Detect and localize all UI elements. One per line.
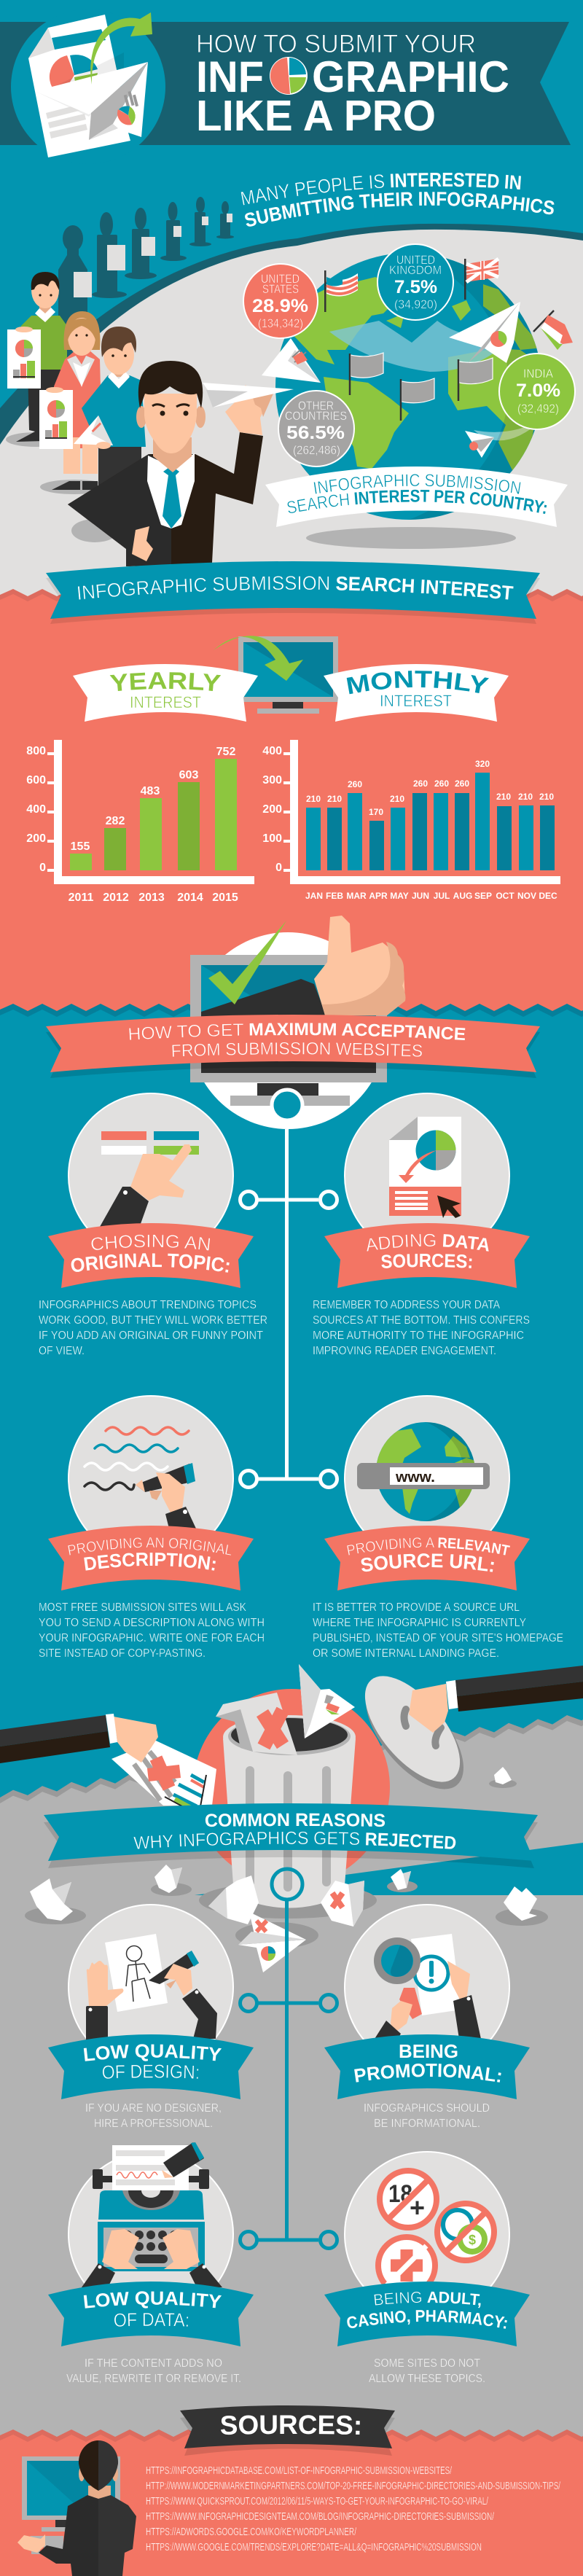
- text: topic body: WORK GOOD, BUT THEY WILL WORK BETTER: [39, 1314, 267, 1327]
- panel: choosing an original topic: [39, 1093, 267, 1357]
- section heading: search interest: [46, 561, 540, 624]
- callout: united states: (134,342): [258, 316, 303, 330]
- ribbon: monthly interest: MONTHLY: [347, 671, 489, 694]
- title: INF: [196, 52, 264, 101]
- text: data sources body: REMEMBER TO ADDRESS YOUR DATA: [313, 1299, 500, 1311]
- text: adult casino pharmacy body: [369, 2357, 485, 2385]
- ribbon: yearly interest: [73, 664, 258, 722]
- heading: being promotional: PROMOTIONAL:: [354, 2064, 501, 2083]
- title: GRAPHIC: [312, 52, 509, 101]
- callout: india: 7.0%: [516, 380, 560, 401]
- flag: united kingdom: [464, 259, 498, 300]
- person at computer: [17, 2440, 136, 2576]
- bar chart: monthly interest: 0: [275, 862, 282, 874]
- bar chart: monthly interest: 210: [539, 792, 554, 802]
- heading: chosing an original topic: [71, 1235, 230, 1273]
- heading: low quality of design: LOW QUALITY: [83, 2044, 222, 2061]
- text: source links: HTTPS://ADWORDS.GOOGLE.COM/KO/KEYWORDPLANNER/: [146, 2526, 357, 2538]
- bar chart: monthly interest: 200: [262, 803, 282, 816]
- heading: relevant source url: PROVIDING A RELEVANT: [347, 1537, 510, 1556]
- heading: relevant source url: SOURCE URL:: [361, 1553, 494, 1572]
- text: source url body: OR SOME INTERNAL LANDING PAGE.: [313, 1647, 499, 1660]
- bar chart: monthly interest: 260: [434, 778, 449, 789]
- text: topic body: OF VIEW.: [39, 1345, 85, 1357]
- callout: other countries: [278, 391, 354, 467]
- callout: other countries: COUNTRIES: [285, 409, 347, 423]
- heading: adult casino pharmacy: CASINO, PHARMACY:: [347, 2310, 507, 2329]
- heading: being promotional: BEING: [399, 2040, 458, 2062]
- text: data body: [66, 2357, 241, 2385]
- callout: other countries: OTHER: [298, 399, 334, 413]
- bar chart: monthly interest: 260: [455, 778, 469, 789]
- bar chart: monthly interest: JUL: [434, 891, 450, 901]
- icon: globe with url bar: [357, 1422, 490, 1521]
- text: data sources body: IMPROVING READER ENGAGEMENT.: [313, 1345, 496, 1357]
- ribbon: monthly interest: [324, 664, 509, 722]
- ribbon: search interest per country: [265, 467, 568, 527]
- panel: providing an original description: [39, 1395, 265, 1660]
- section heading: common reasons: [44, 1803, 538, 1868]
- bar chart: monthly interest: MAR: [346, 891, 367, 901]
- section heading: sources: SOURCES:: [221, 2415, 360, 2435]
- person: businessman: [68, 361, 294, 566]
- text: description body: MOST FREE SUBMISSION SITES WILL ASK: [39, 1601, 246, 1614]
- icon: hand drawing stick figure: [86, 1934, 217, 2041]
- text: description body: SITE INSTEAD OF COPY-PASTING.: [39, 1647, 206, 1660]
- icon: prohibited pharmacy: [378, 2237, 435, 2294]
- panel: being adult, casino, pharmacy: [324, 2151, 530, 2385]
- heading: low quality of data: [83, 2291, 222, 2327]
- bar chart: yearly interest: 600: [26, 774, 46, 787]
- monitor with arrow: [214, 636, 338, 714]
- text: topic body: INFOGRAPHICS ABOUT TRENDING TOPICS: [39, 1299, 257, 1311]
- title: [196, 30, 509, 140]
- bar chart: yearly interest: 800: [26, 745, 46, 757]
- timeline: teal connector: [240, 1869, 337, 2248]
- bar chart: monthly interest: 400: [262, 745, 282, 757]
- subtitle: [240, 173, 554, 227]
- panel: providing a relevant source url: [313, 1395, 563, 1660]
- icon: prohibited casino chips: [437, 2204, 494, 2260]
- panel: low quality of design: [48, 1904, 254, 2130]
- person: green sweater: [6, 272, 67, 447]
- callout: india: [499, 354, 575, 429]
- callout: india: INDIA: [523, 367, 554, 380]
- header circle: [11, 9, 165, 164]
- bar chart: monthly interest: 260: [348, 779, 362, 789]
- bar chart: yearly interest: 282: [106, 815, 125, 827]
- section heading: sources: [180, 2405, 395, 2456]
- bar chart: yearly interest: 155: [71, 840, 90, 853]
- flag: united states: [324, 270, 358, 312]
- section heading: maximum acceptance: FROM SUBMISSION WEBSITES: [172, 1042, 422, 1057]
- bar chart: monthly interest: MAY: [390, 891, 409, 901]
- bar chart: monthly interest: [262, 740, 560, 901]
- person: teal sweater: [71, 327, 146, 542]
- section heading: maximum acceptance: [46, 1015, 540, 1078]
- bar chart: yearly interest: 603: [179, 769, 198, 781]
- flag: india: [533, 311, 573, 350]
- header ribbon: [0, 22, 571, 145]
- bar chart: yearly interest: [26, 740, 254, 904]
- globe: [275, 253, 543, 520]
- bar chart: monthly interest: 170: [369, 807, 383, 817]
- text: source links: [146, 2464, 561, 2553]
- heading: low quality of design: [83, 2044, 222, 2079]
- heading: chosing an original topic: CHOSING AN: [92, 1235, 210, 1251]
- bar chart: monthly interest: APR: [369, 891, 388, 901]
- text: data sources body: [313, 1299, 530, 1357]
- heading: adding data sources: ADDING DATA: [367, 1233, 489, 1252]
- text: data sources body: MORE AUTHORITY TO THE INFOGRAPHIC: [313, 1330, 524, 1342]
- callout: united kingdom: UNITED: [396, 253, 435, 267]
- callout: united kingdom: 7.5%: [394, 277, 437, 297]
- bar chart: monthly interest: 210: [518, 792, 533, 802]
- heading: low quality of data: OF DATA:: [114, 2313, 188, 2327]
- section heading: maximum acceptance: HOW TO GET MAXIMUM ACCEPTANCE: [129, 1023, 465, 1040]
- section heading: search interest: INFOGRAPHIC SUBMISSION SEARCH INTEREST: [77, 576, 514, 600]
- heading: original description: [68, 1537, 232, 1571]
- icon: prohibited adult: 18: [388, 2180, 412, 2208]
- ribbon: search interest per country: INFOGRAPHIC SUBMISSION: [313, 474, 521, 494]
- icon: typewriter: [82, 2142, 222, 2287]
- paper planes on globe: [262, 302, 520, 458]
- callout: united kingdom: (34,920): [394, 297, 437, 311]
- bar chart: monthly interest: FEB: [326, 891, 343, 901]
- callout: united states: 28.9%: [252, 296, 308, 316]
- heading: being promotional: [354, 2040, 501, 2083]
- text: promotional body: [364, 2102, 490, 2130]
- subtitle: SUBMITTING THEIR INFOGRAPHICS: [245, 192, 554, 227]
- text: data body: IF THE CONTENT ADDS NO: [85, 2357, 222, 2370]
- icon: document with pie and paper plane: [28, 15, 148, 157]
- title: HOW TO SUBMIT YOUR: [196, 30, 476, 58]
- text: description body: [39, 1601, 265, 1660]
- heading: low quality of data: LOW QUALITY: [83, 2291, 222, 2308]
- bar chart: monthly interest: 320: [475, 759, 490, 769]
- heading: adult casino pharmacy: BEING ADULT,: [374, 2292, 481, 2308]
- panel: adding data sources: [313, 1093, 530, 1357]
- text: description body: YOU TO SEND A DESCRIPTION ALONG WITH: [39, 1617, 265, 1629]
- bar chart: yearly interest: 0: [39, 862, 46, 874]
- callout: other countries: 56.5%: [286, 423, 345, 443]
- bar chart: yearly interest: 400: [26, 803, 46, 816]
- section heading: common reasons: COMMON REASONS: [206, 1814, 385, 1827]
- ribbon: monthly interest: INTEREST: [380, 692, 452, 710]
- silhouettes documents: [74, 214, 232, 297]
- bar chart: monthly interest: DEC: [539, 891, 557, 901]
- bar chart: monthly interest: JUN: [412, 891, 429, 901]
- icon: prohibited adult: [380, 2171, 437, 2228]
- icon: document with pie chart and cursor: [389, 1117, 461, 1218]
- heading: adding data sources: [367, 1233, 489, 1268]
- bar chart: yearly interest: 200: [26, 832, 46, 845]
- heading: chosing an original topic: ORIGINAL TOPIC:: [71, 1253, 230, 1273]
- callout: united states: STATES: [262, 282, 299, 296]
- title: LIKE A PRO: [196, 92, 436, 140]
- subtitle: MANY PEOPLE IS INTERESTED IN: [240, 173, 521, 206]
- bar chart: monthly interest: SEP: [474, 891, 492, 901]
- text: data sources body: SOURCES AT THE BOTTOM. THIS CONFERS: [313, 1314, 530, 1327]
- icon: magnifier and alert sheet: [374, 1934, 481, 2039]
- text: source url body: IT IS BETTER TO PROVIDE A SOURCE URL: [313, 1601, 520, 1614]
- bar chart: monthly interest: 300: [262, 774, 282, 787]
- globe shadow: [306, 527, 516, 549]
- heading: adding data sources: SOURCES:: [382, 1254, 472, 1268]
- text: data body: VALUE, REWRITE IT OR REMOVE IT.: [66, 2373, 241, 2385]
- text: promotional body: INFOGRAPHICS SHOULD: [364, 2102, 490, 2115]
- heading: low quality of design: OF DESIGN:: [102, 2064, 198, 2079]
- bar chart: monthly interest: 210: [390, 794, 404, 804]
- bar chart: yearly interest: 2011: [69, 891, 93, 904]
- text: promotional body: BE INFORMATIONAL.: [374, 2118, 480, 2130]
- icon: prohibited adult: +: [410, 2193, 425, 2222]
- heading: adult casino pharmacy: [347, 2292, 507, 2329]
- timeline: white connector: [240, 1129, 337, 1487]
- text: adult casino pharmacy body: SOME SITES DO NOT: [374, 2357, 480, 2370]
- crumpled papers: [25, 1767, 548, 1927]
- icon: globe with url bar: www.: [395, 1470, 435, 1486]
- ribbon: search interest per country: SEARCH INTEREST PER COUNTRY:: [287, 490, 547, 514]
- icon: monitor with check and thumbs up: [189, 916, 405, 1129]
- bar chart: monthly interest: AUG: [453, 891, 472, 901]
- panel: being promotional: [324, 1904, 530, 2130]
- bar chart: yearly interest: 483: [141, 785, 160, 797]
- text: source url body: [313, 1601, 563, 1660]
- callout: other countries: (262,486): [293, 443, 340, 457]
- text: design body: IF YOU ARE NO DESIGNER,: [85, 2102, 222, 2115]
- icon: hand writing squiggles: [85, 1427, 196, 1529]
- bar chart: yearly interest: 752: [216, 746, 235, 758]
- ribbon: yearly interest: YEARLY: [109, 672, 222, 691]
- text: source url body: WHERE THE INFOGRAPHIC IS CURRENTLY: [313, 1617, 526, 1629]
- ribbon: yearly interest: INTEREST: [130, 693, 201, 711]
- icon: trash can with rejected papers: [0, 1660, 583, 1948]
- text: topic body: IF YOU ADD AN ORIGINAL OR FUNNY POINT: [39, 1330, 263, 1342]
- icon: hand selecting option: [97, 1131, 199, 1232]
- bar chart: monthly interest: 210: [327, 794, 342, 804]
- bar chart: yearly interest: 2013: [138, 891, 165, 904]
- bar chart: monthly interest: 260: [413, 778, 428, 789]
- text: adult casino pharmacy body: ALLOW THESE TOPICS.: [369, 2373, 485, 2385]
- heading: original description: DESCRIPTION:: [84, 1553, 216, 1571]
- arrow: green curved: [90, 12, 152, 85]
- text: description body: YOUR INFOGRAPHIC. WRITE ONE FOR EACH: [39, 1632, 265, 1644]
- section heading: common reasons: WHY INFOGRAPHICS GETS REJECTED: [133, 1831, 456, 1849]
- callout: united kingdom: KINGDOM: [389, 263, 442, 277]
- person: woman in red: [39, 311, 109, 494]
- bar chart: monthly interest: 210: [306, 794, 321, 804]
- bar chart: yearly interest: 2015: [212, 891, 238, 904]
- bar chart: monthly interest: 210: [496, 792, 511, 802]
- text: design body: [85, 2102, 222, 2130]
- bar chart: monthly interest: JAN: [305, 891, 323, 901]
- bar chart: monthly interest: NOV: [517, 891, 536, 901]
- icon: rejected paper plane: [238, 1912, 306, 1972]
- heading: original description: PROVIDING AN ORIGINAL: [68, 1537, 232, 1556]
- bar chart: monthly interest: OCT: [496, 891, 514, 901]
- heading: relevant source url: [347, 1537, 510, 1572]
- panel: low quality of data: [48, 2142, 254, 2385]
- callout: united states: [243, 264, 318, 338]
- callout: india: (32,492): [517, 402, 559, 415]
- icon: prohibited casino chips: $: [469, 2233, 476, 2247]
- bar chart: yearly interest: 2012: [103, 891, 129, 904]
- callout: united states: UNITED: [261, 272, 300, 286]
- callout: united kingdom: [377, 244, 453, 320]
- flags: grey markers: [350, 353, 493, 421]
- silhouettes queue: [58, 197, 234, 335]
- bar chart: yearly interest: 2014: [177, 891, 203, 904]
- bar chart: monthly interest: 100: [262, 832, 282, 845]
- text: topic body: [39, 1299, 267, 1357]
- text: design body: HIRE A PROFESSIONAL.: [94, 2118, 213, 2130]
